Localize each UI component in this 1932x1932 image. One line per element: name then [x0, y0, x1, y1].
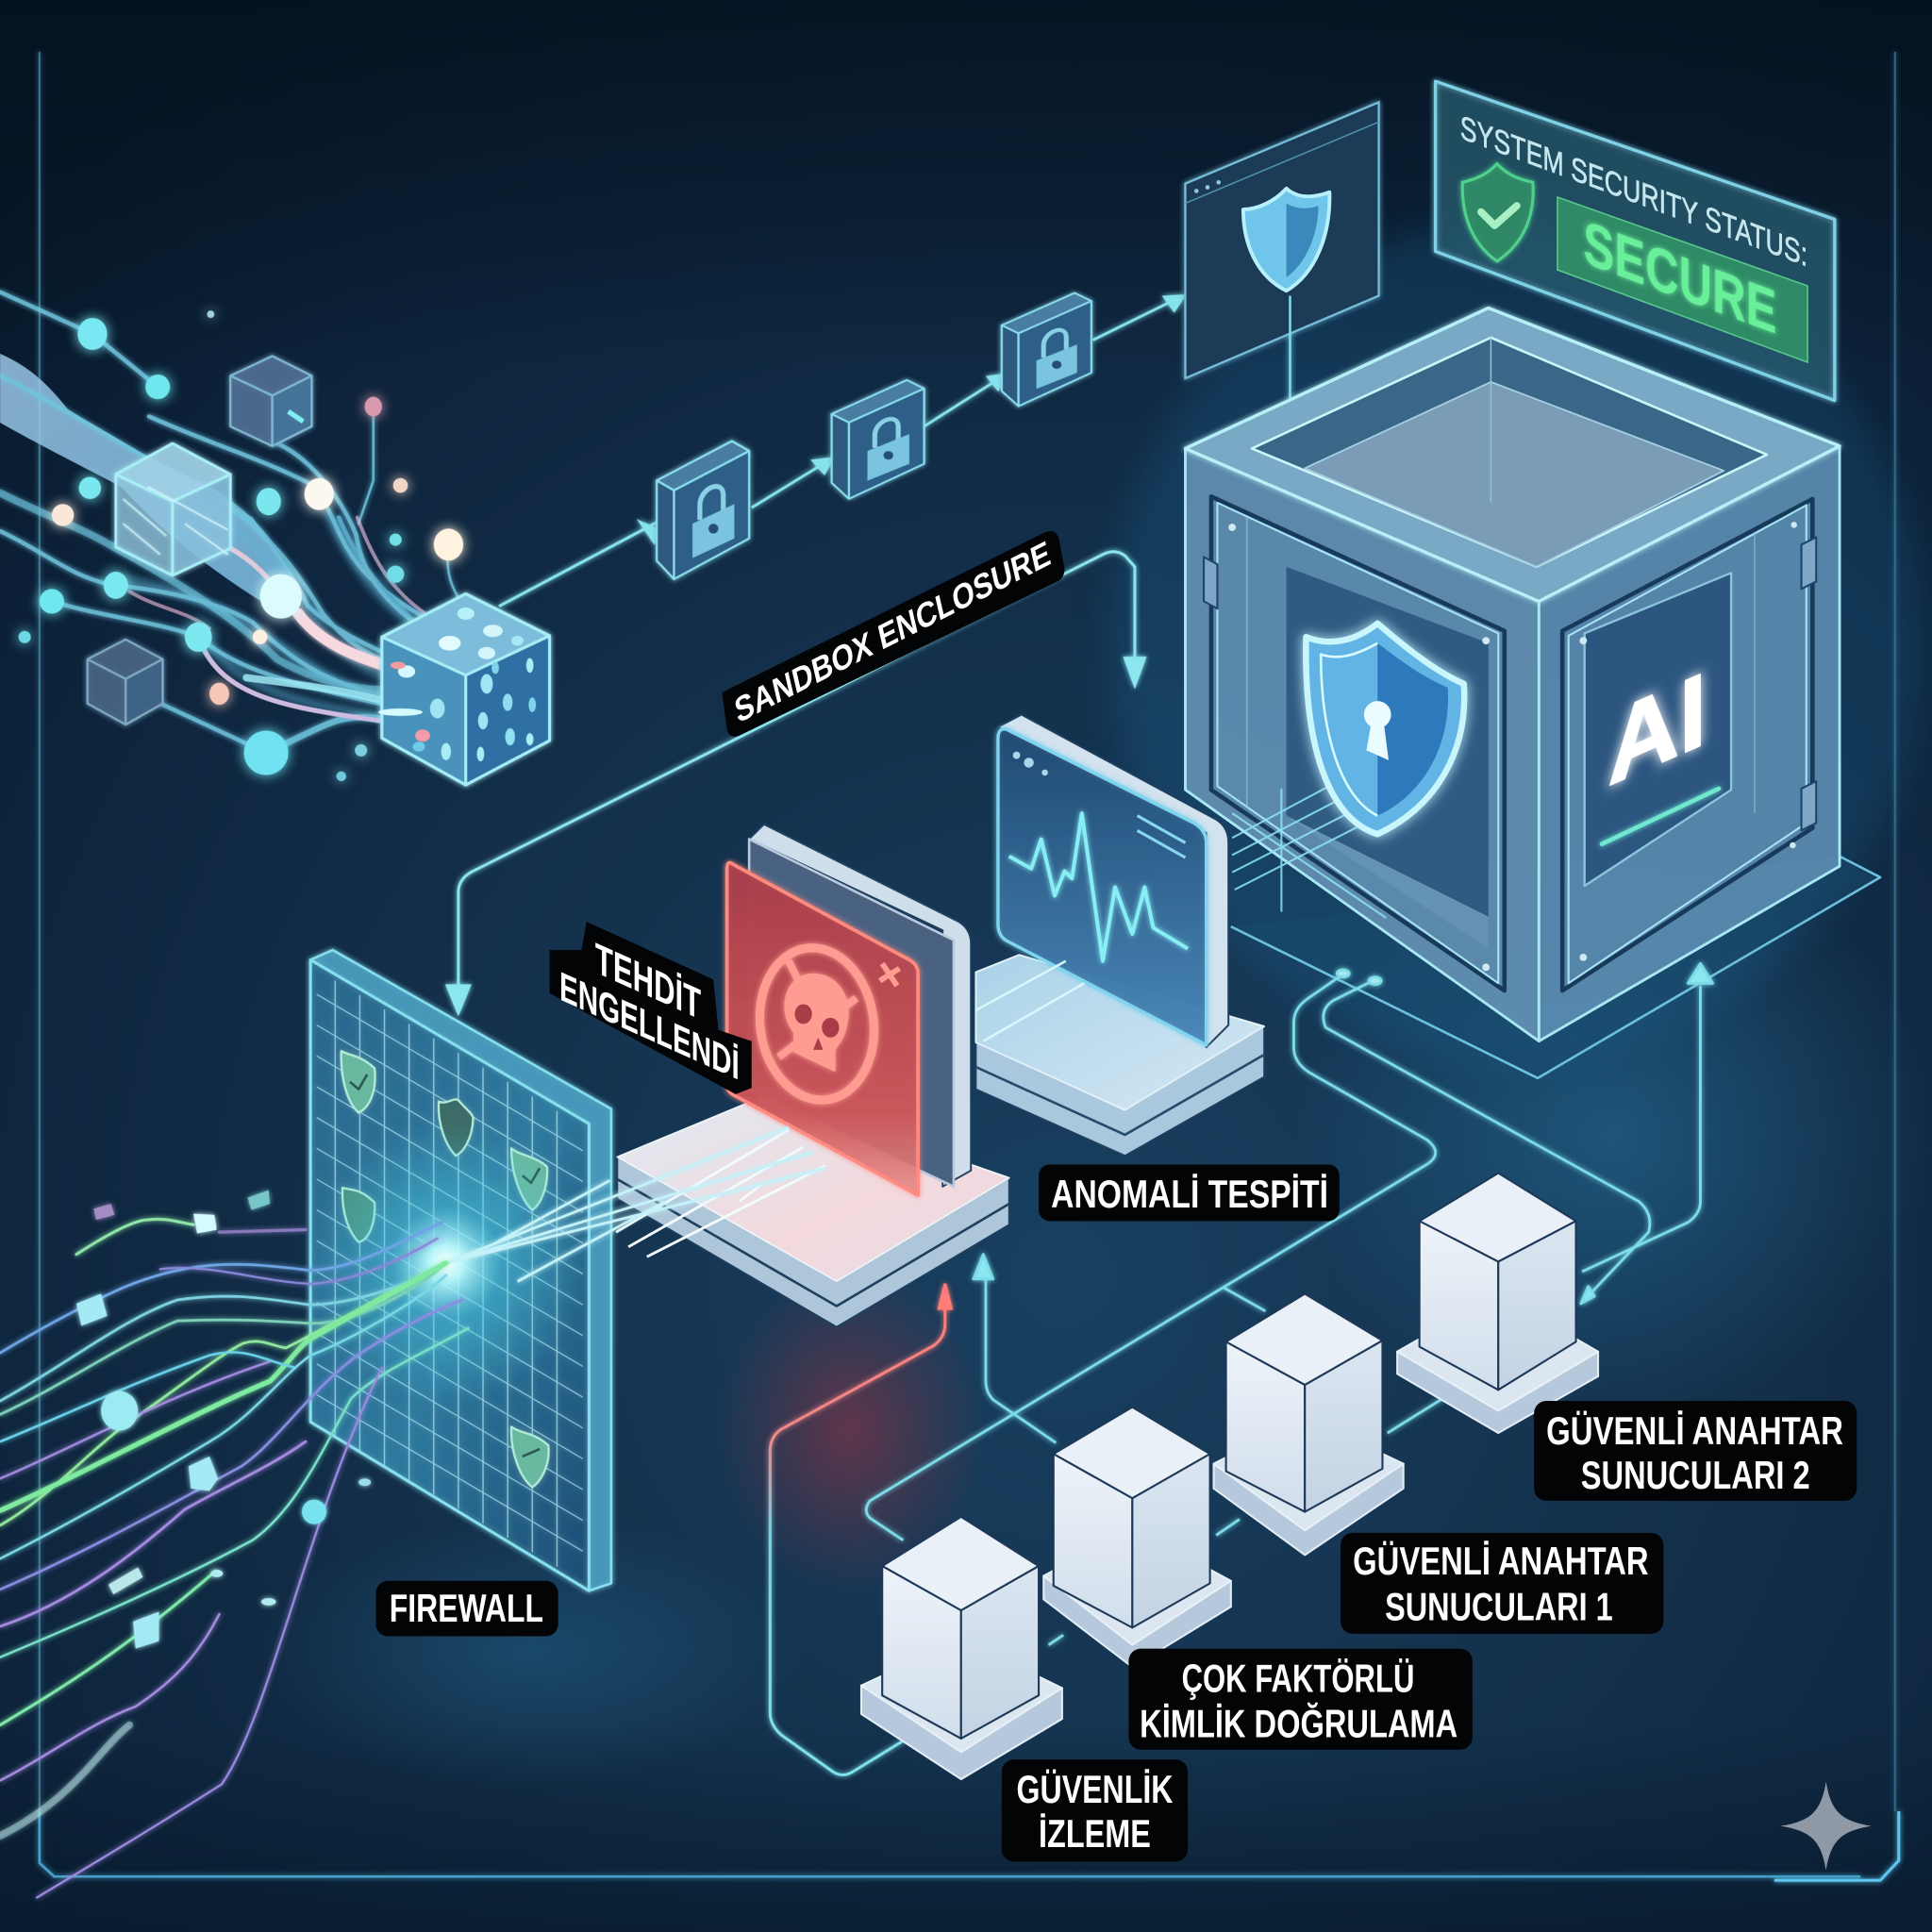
AI green underline: [1602, 789, 1719, 844]
label: secure key servers 1: GÜVENLİ ANAHTAR: [1353, 1539, 1649, 1583]
connector lines between services: [866, 963, 1713, 1645]
server block 3: [1214, 1293, 1404, 1555]
server block 1: [861, 1517, 1062, 1779]
shield panel: [1185, 102, 1379, 404]
small dark cube bottom: [88, 640, 162, 724]
label: security monitoring: İZLEME: [1039, 1811, 1151, 1856]
anomaly label: ANOMALİ TESPİTİ: [1051, 1172, 1328, 1216]
beams from firewall to threat platform: [446, 1127, 825, 1281]
status value: SECURE: [1583, 208, 1776, 348]
glass cube: [116, 443, 230, 575]
label: security monitoring: GÜVENLİK: [1017, 1767, 1173, 1811]
right inner panel: [1585, 573, 1731, 886]
threat label line 1: TEHDİT: [595, 935, 701, 1030]
label: secure key servers 1: SUNUCULARI 1: [1385, 1585, 1613, 1629]
threat label line 2: ENGELLENDİ: [559, 962, 740, 1090]
arrow: lock 3 to shield panel: [1093, 295, 1184, 340]
red cross icon: [880, 963, 899, 986]
left face: [1185, 448, 1539, 1041]
firewall label: [375, 1581, 558, 1637]
status badge: [1557, 197, 1807, 362]
firewall face: [310, 959, 589, 1591]
data nodes: [19, 310, 463, 781]
label: security monitoring: [1002, 1759, 1188, 1862]
left door: [1211, 496, 1505, 991]
server block 2: [1043, 1407, 1231, 1667]
red alert panel: [727, 863, 918, 1195]
lock block 1: [657, 441, 749, 579]
inner floor: [1305, 382, 1724, 567]
grey monitor: [749, 824, 971, 1187]
anomaly detection monitor: [975, 715, 1264, 1156]
firewall side and top: [310, 950, 611, 1591]
right face: [1539, 446, 1840, 1041]
filtered traffic streams: [0, 1219, 468, 1897]
traffic packets: [76, 1191, 371, 1649]
waveform: [1009, 813, 1188, 961]
light beams on platform: [616, 1130, 825, 1257]
label: secure key servers 2: [1534, 1401, 1857, 1501]
label: multi-factor authentication: KİMLİK DOĞRULAMA: [1140, 1702, 1457, 1746]
left inner panel: [1287, 567, 1489, 917]
status shield icon: [1462, 164, 1533, 261]
icon: sparkle watermark: [1780, 1782, 1872, 1871]
label: multi-factor authentication: [1128, 1649, 1473, 1750]
label: secure key servers 2: GÜVENLİ ANAHTAR: [1546, 1408, 1843, 1453]
firewall panel: [310, 950, 611, 1591]
arrow: lock 2 to lock 3: [924, 375, 1007, 426]
sandbox label: [722, 531, 1064, 737]
vault shield icon: [1306, 624, 1464, 834]
label: secure key servers 1: [1341, 1533, 1663, 1634]
main AI vault: [1185, 308, 1880, 1078]
particle cube: [378, 594, 550, 785]
incoming data streams: [0, 292, 458, 753]
anomaly label: [1039, 1164, 1340, 1221]
monitor platform: [975, 1026, 1264, 1156]
status panel: [1436, 81, 1835, 400]
monitor screen: [998, 729, 1207, 1045]
monitor body: [998, 715, 1228, 1047]
firewall shields: [341, 1051, 549, 1487]
label: multi-factor authentication: ÇOK FAKTÖRLÜ: [1182, 1656, 1414, 1700]
door hinges: [1204, 537, 1816, 830]
label: secure key servers 2: SUNUCULARI 2: [1581, 1453, 1810, 1497]
blocked skull icon: [750, 941, 884, 1108]
door rivets: [1228, 522, 1797, 971]
lock block 3: [1002, 293, 1091, 406]
firewall core glow: [305, 1122, 588, 1405]
connector: sandbox loop: [447, 552, 1144, 1013]
platform: [617, 1157, 1009, 1327]
beam lines into vault: [1232, 769, 1386, 918]
firewall label: FIREWALL: [390, 1586, 543, 1630]
right door: [1562, 499, 1812, 991]
top opening: [1252, 338, 1767, 567]
status title: SYSTEM SECURITY STATUS:: [1460, 108, 1807, 274]
connector: red alert path: [770, 1284, 951, 1774]
firewall grid: [317, 970, 583, 1582]
sandbox label text: SANDBOX ENCLOSURE: [731, 533, 1054, 731]
threat label: [550, 922, 752, 1094]
arrow: particle cube to lock 1: [499, 523, 660, 607]
server block 4: [1397, 1173, 1598, 1433]
base plate: [1231, 857, 1880, 1078]
threat platform with skull monitor: [616, 824, 1009, 1327]
top face: [1185, 308, 1840, 601]
status check mark: [1481, 206, 1517, 225]
AI text: AI: [1607, 650, 1707, 808]
small dark cube top: [230, 356, 311, 446]
arrow: lock 1 to lock 2: [752, 458, 833, 508]
lock block 2: [832, 380, 924, 499]
window dots: [1013, 752, 1048, 775]
